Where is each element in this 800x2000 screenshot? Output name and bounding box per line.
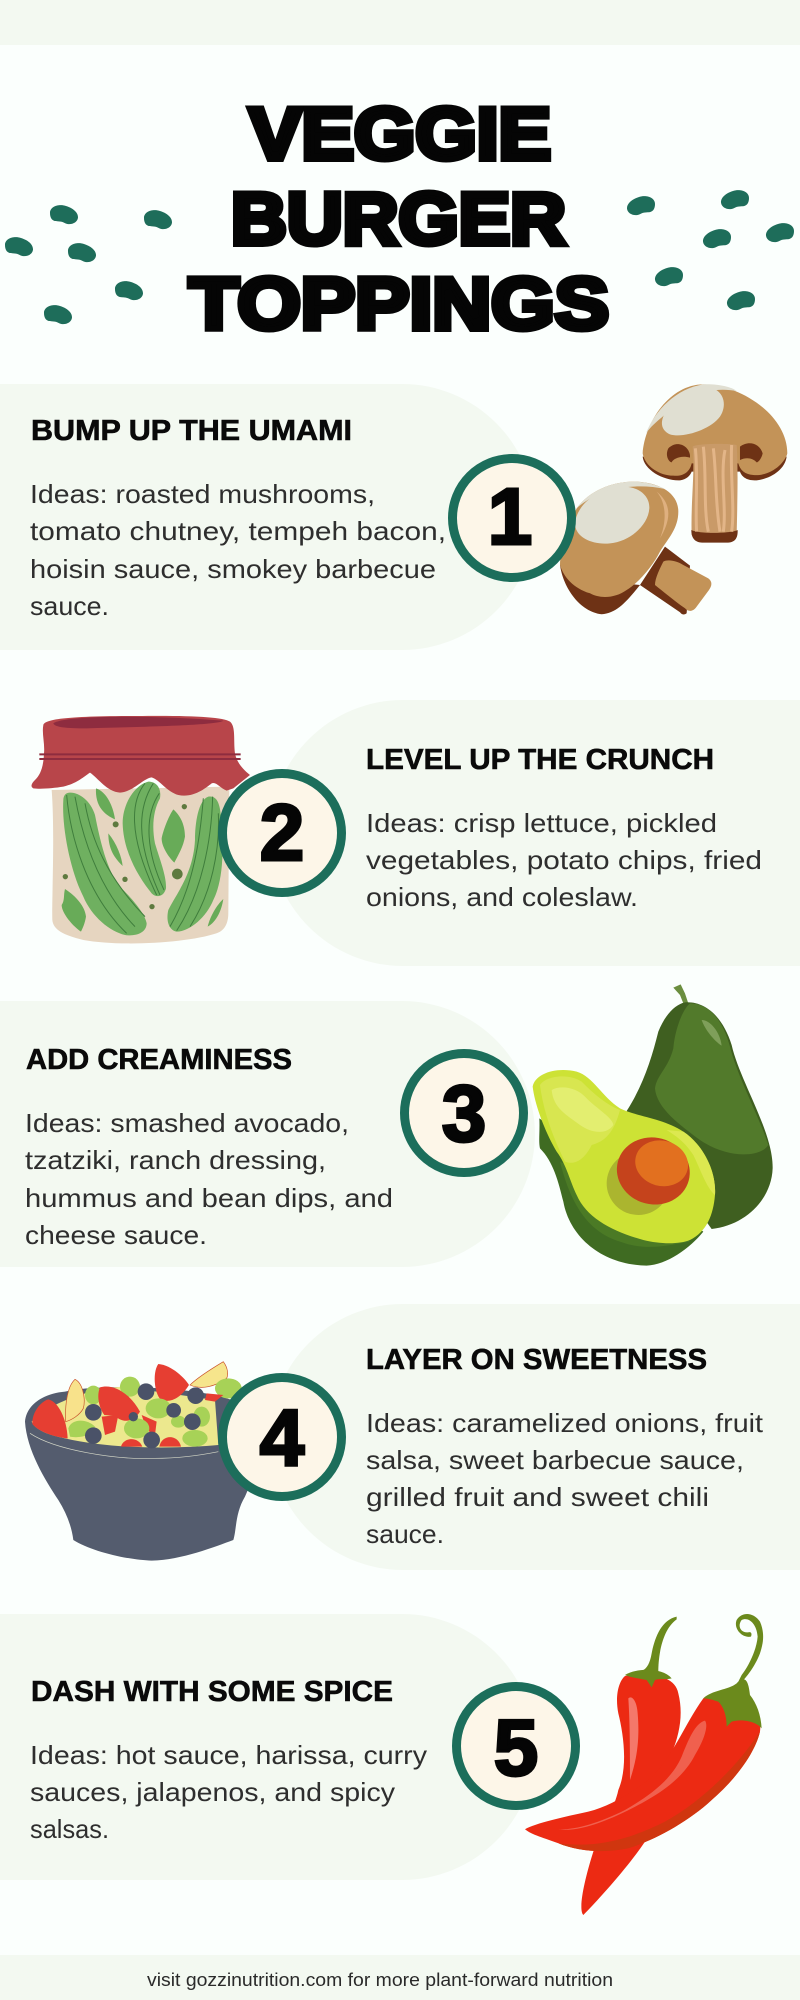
text block 3: cheese sauce.	[25, 1220, 207, 1250]
text block 3: Ideas: smashed avocado,	[25, 1108, 349, 1138]
text block 5	[30, 1740, 427, 1844]
number 5 badge	[456, 1686, 576, 1806]
icon: pickle jar	[32, 716, 250, 943]
text block 5: salsas.	[30, 1814, 109, 1844]
title: TOPPINGS	[189, 264, 609, 345]
text block 1: tomato chutney, tempeh bacon,	[30, 516, 446, 546]
icon: avocado	[533, 984, 773, 1266]
number 4 badge: 4	[260, 1393, 305, 1482]
text block 3: hummus and bean dips, and	[25, 1183, 393, 1213]
title: VEGGIE	[249, 94, 551, 175]
beans: left cluster	[5, 205, 172, 324]
number 5 badge: 5	[494, 1703, 538, 1792]
text block 1: Ideas: roasted mushrooms,	[30, 479, 375, 509]
text block 4: grilled fruit and sweet chili	[366, 1482, 709, 1512]
text block 3	[25, 1108, 393, 1250]
text block 2: onions, and coleslaw.	[366, 882, 638, 912]
number 3 badge: 3	[442, 1069, 486, 1158]
heading 4: LAYER ON SWEETNESS	[366, 1344, 707, 1376]
number 2 badge	[222, 774, 342, 892]
panel 2: crunch	[270, 700, 800, 966]
panel 5: spice	[0, 1614, 535, 1880]
text block 3: tzatziki, ranch dressing,	[25, 1145, 326, 1175]
panel 1: umami	[0, 384, 535, 650]
beans: right cluster	[627, 190, 794, 310]
title: BURGER	[231, 179, 566, 260]
text block 2	[366, 808, 762, 912]
text block 1	[30, 479, 446, 621]
text block 4	[366, 1408, 764, 1549]
icon: mushrooms	[560, 384, 787, 615]
text block 5: Ideas: hot sauce, harissa, curry	[30, 1740, 427, 1770]
top band	[0, 0, 800, 45]
number 1 badge	[452, 458, 572, 578]
panel 3: creaminess	[0, 1001, 535, 1267]
panel 4: sweetness	[270, 1304, 800, 1570]
text block 5: sauces, jalapenos, and spicy	[30, 1777, 395, 1807]
footer text: visit gozzinutrition.com for more plant-forward nutrition	[147, 1970, 613, 1990]
icon: chili peppers	[525, 1614, 763, 1915]
heading 5: DASH WITH SOME SPICE	[31, 1676, 393, 1708]
heading 1: BUMP UP THE UMAMI	[31, 415, 352, 447]
number 4 badge	[222, 1378, 342, 1496]
footer band	[0, 1955, 800, 2000]
text block 4: sauce.	[366, 1519, 444, 1549]
text block 1: hoisin sauce, smokey barbecue	[30, 554, 436, 584]
heading 3: ADD CREAMINESS	[26, 1044, 292, 1076]
text block 1: sauce.	[30, 591, 109, 621]
text block 2: Ideas: crisp lettuce, pickled	[366, 808, 717, 838]
title	[189, 94, 609, 345]
text block 2: vegetables, potato chips, fried	[366, 845, 762, 875]
number 2 badge: 2	[260, 788, 304, 877]
text block 4: Ideas: caramelized onions, fruit	[366, 1408, 764, 1438]
icon: fruit salsa bowl	[25, 1362, 265, 1561]
heading 2: LEVEL UP THE CRUNCH	[366, 744, 714, 776]
text block 4: salsa, sweet barbecue sauce,	[366, 1445, 744, 1475]
number 1 badge: 1	[488, 472, 532, 561]
number 3 badge	[404, 1054, 524, 1172]
